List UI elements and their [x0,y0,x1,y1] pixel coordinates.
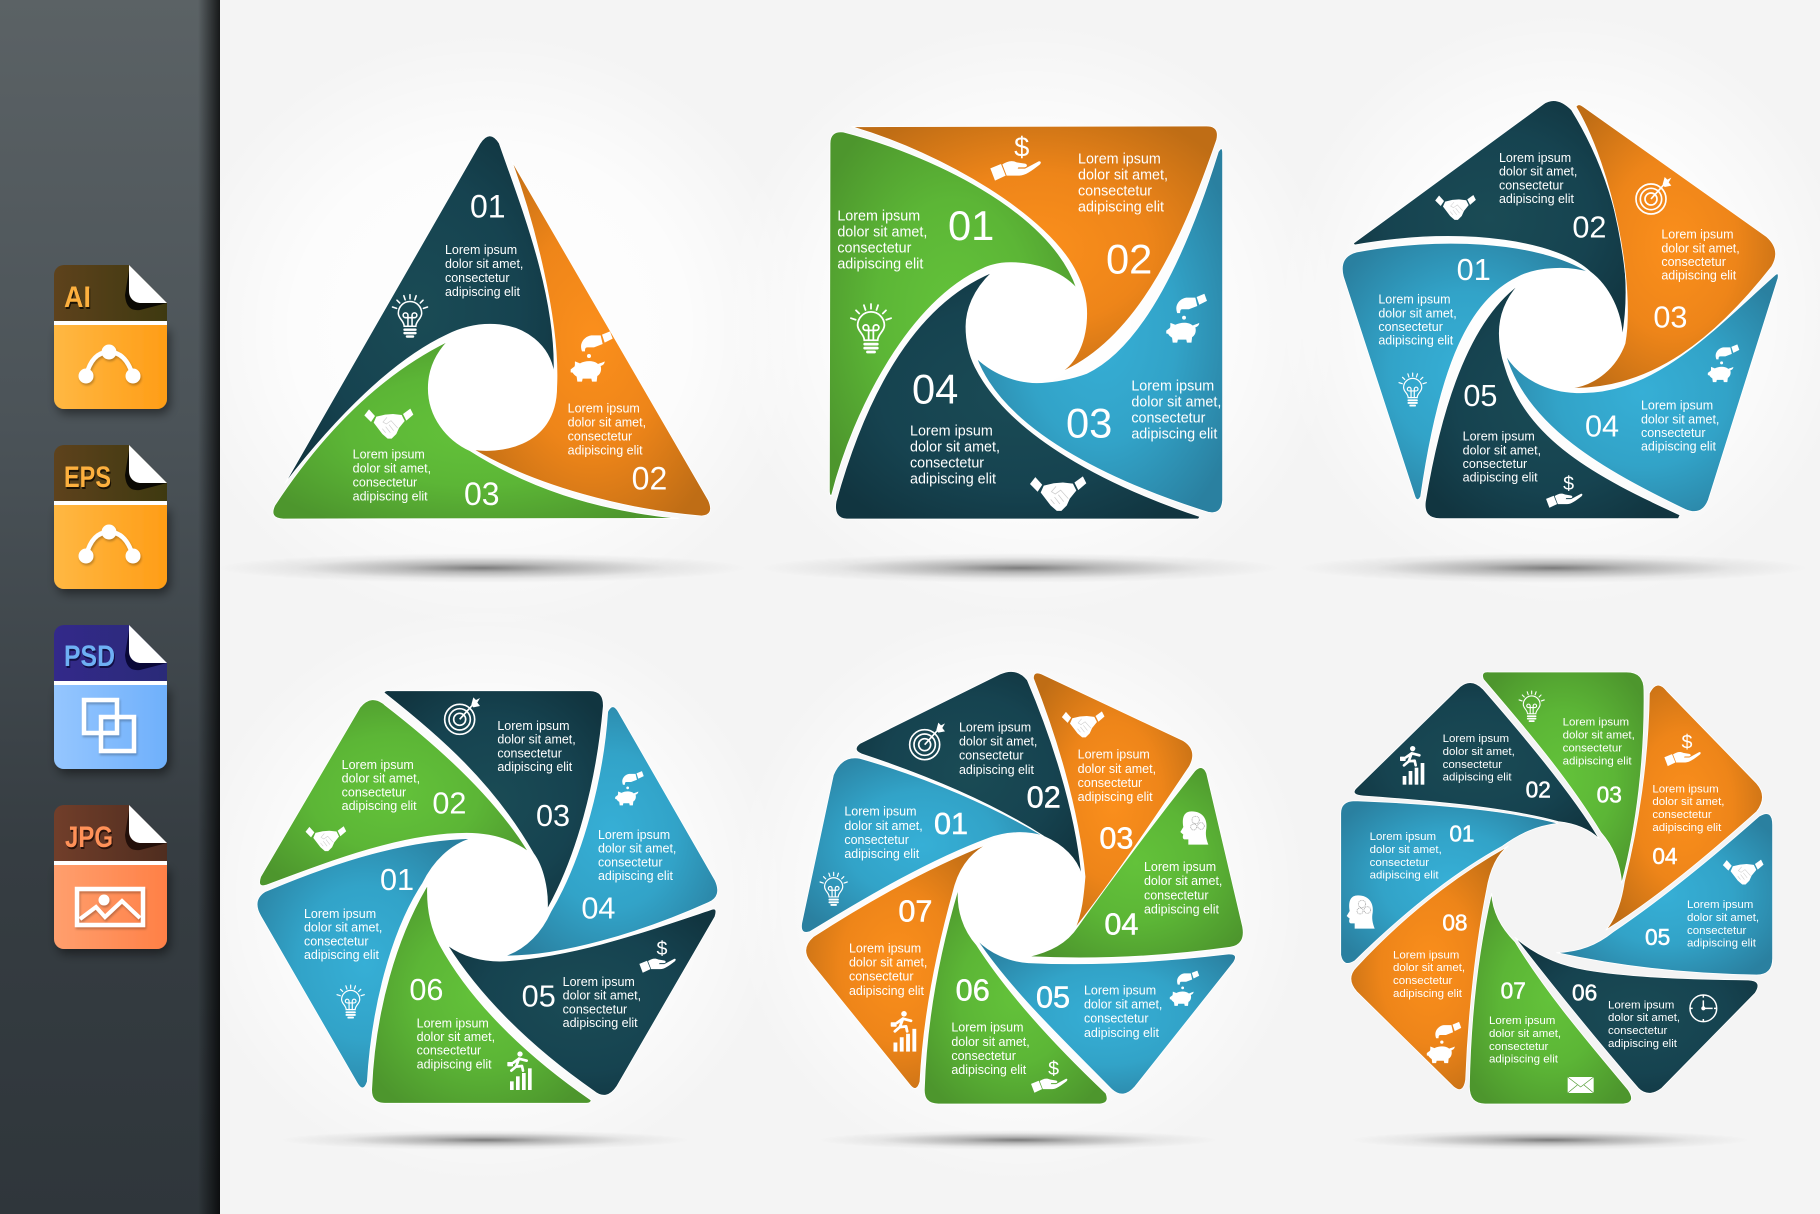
segment 01 [829,132,1077,495]
segment 07 [806,843,989,1088]
text 07: Lorem ipsum [849,941,921,955]
segment 01 [801,758,1043,932]
icon: piggy bank [571,331,613,382]
segment 03 [1033,673,1193,928]
panel: octagon diagram [1341,672,1773,1104]
number 01: 01 [470,189,506,225]
number 05: 05 [1036,981,1070,1015]
icon: bulb [1399,373,1426,406]
text 03: consectetur [353,475,417,489]
segment 05 [1425,285,1680,519]
segment 01 [285,136,554,483]
text 02: adipiscing elit [1499,192,1574,206]
text 08: dolor sit amet, [1393,962,1465,974]
text 05: dolor sit amet, [1084,997,1162,1011]
icon: envelope [1568,1077,1594,1093]
text 08: Lorem ipsum [1393,949,1459,961]
text 02: Lorem ipsum [959,720,1031,734]
text 03: consectetur [497,746,562,760]
text 07: dolor sit amet, [1489,1028,1561,1040]
icon: target [1636,177,1671,214]
text 06: adipiscing elit [417,1057,492,1071]
number 02: 02 [432,786,466,820]
text 03: consectetur [1078,776,1142,790]
number 03: 03 [1066,400,1112,447]
segment 04 [1506,274,1778,512]
text 02: consectetur [1443,759,1502,771]
text 05: consectetur [1084,1012,1149,1026]
number 04: 04 [912,365,958,412]
text 04: dolor sit amet, [1144,874,1222,888]
text 04: adipiscing elit [1652,822,1722,834]
text 02: adipiscing elit [568,444,643,458]
text 05: dolor sit amet, [563,989,641,1003]
number 05: 05 [522,980,556,1014]
icon: head with gears [1347,895,1375,929]
file icon: PSD: PSD [64,640,115,673]
text 02: Lorem ipsum [342,758,414,772]
text 05: Lorem ipsum [1463,430,1535,444]
text 07: adipiscing elit [1489,1054,1559,1066]
text 01: Lorem ipsum [1378,293,1451,307]
file icon: AI [54,265,167,409]
number 02: 02 [632,460,667,496]
number 02: 02 [1572,210,1606,244]
text 05: consectetur [1687,925,1747,937]
icon: piggy bank [1166,294,1207,343]
panel: square diagram [829,126,1223,519]
text 02: adipiscing elit [1443,772,1512,784]
icon: hand with dollar [1664,732,1701,766]
icon: piggy bank [1708,344,1739,382]
segment 04 [836,273,1200,519]
text 07: consectetur [849,970,914,984]
segment 01 [1341,801,1558,963]
number 06: 06 [1572,980,1597,1006]
file icon: EPS [54,445,167,589]
text 03: Lorem ipsum [1563,717,1629,729]
segment 02 [856,671,1082,875]
text 06: adipiscing elit [951,1063,1027,1077]
icon: bulb [392,295,428,337]
text 04: adipiscing elit [598,869,673,883]
text 01: adipiscing elit [844,847,920,861]
number 02: 02 [1027,781,1061,815]
text 02: dolor sit amet, [1078,167,1168,183]
text 03: consectetur [1131,411,1206,427]
number 08: 08 [1442,910,1468,936]
text 06: dolor sit amet, [417,1030,495,1044]
text 05: adipiscing elit [563,1016,638,1030]
icon: clock [1690,995,1717,1022]
text 01: Lorem ipsum [445,243,517,257]
text 02: Lorem ipsum [568,402,640,416]
text 01: consectetur [1378,320,1443,334]
text 01: consectetur [445,271,510,285]
text 06: Lorem ipsum [417,1016,489,1030]
number 03: 03 [1653,301,1687,335]
number 02: 02 [1106,235,1152,282]
segment 01 [1342,243,1589,500]
file icon: AI: AI [64,281,91,314]
text 02: Lorem ipsum [1499,151,1571,165]
segment 05 [447,909,716,1095]
segment 04 [505,707,718,956]
text 05: Lorem ipsum [563,975,635,989]
text 07: dolor sit amet, [849,955,927,969]
number 03: 03 [536,799,570,833]
text 06: dolor sit amet, [1608,1012,1680,1024]
text 03: adipiscing elit [1078,790,1153,804]
segment 07 [1469,893,1632,1104]
text 05: consectetur [1463,457,1527,471]
file icon: EPS: EPS [64,461,111,494]
text 04: Lorem ipsum [910,423,993,439]
text 05: adipiscing elit [1463,471,1538,485]
sidebar [0,0,220,1214]
number 01: 01 [1457,253,1491,287]
icon: handshake [1435,195,1476,220]
segment 08 [1351,846,1508,1090]
number 05: 05 [1645,924,1670,950]
segment 06 [924,888,1107,1104]
icon: hand with dollar [990,131,1041,181]
panel: heptagon diagram [801,671,1243,1104]
segment 04 [1606,685,1762,930]
glow: top row [170,10,1820,630]
icon: runner on bars [1400,746,1424,785]
ground shadows [217,553,1808,1150]
text 06: dolor sit amet, [951,1035,1030,1049]
text 04: consectetur [1641,426,1706,440]
text 01: adipiscing elit [837,256,923,272]
icon: bulb [851,304,891,352]
number 01: 01 [1449,820,1475,846]
segment 02 [852,126,1217,373]
text 05: adipiscing elit [1687,938,1757,950]
number 04: 04 [581,892,615,926]
icon: bulb [1519,691,1544,721]
text 02: consectetur [1078,183,1152,199]
number 07: 07 [1501,977,1526,1003]
number 06: 06 [956,974,990,1008]
text 04: Lorem ipsum [598,828,670,842]
number 03: 03 [1099,822,1133,856]
text 03: dolor sit amet, [1661,241,1740,255]
number 04: 04 [1652,843,1678,869]
segment 01 [257,838,472,1088]
text 03: Lorem ipsum [1131,379,1214,395]
text 03: Lorem ipsum [1661,228,1734,242]
text 08: consectetur [1393,975,1453,987]
number 01: 01 [934,807,968,841]
text 01: adipiscing elit [1370,870,1439,882]
panel: hexagon diagram [257,691,718,1103]
icon: handshake [306,826,346,851]
text 02: dolor sit amet, [1499,165,1577,179]
icon: piggy bank [1170,971,1199,1006]
number 07: 07 [898,895,932,929]
text 04: dolor sit amet, [1652,796,1724,808]
text 01: consectetur [837,240,912,256]
text 04: consectetur [910,455,984,471]
number 01: 01 [948,202,994,249]
text 01: dolor sit amet, [1378,306,1457,320]
text 04: dolor sit amet, [598,842,676,856]
text 04: Lorem ipsum [1652,783,1719,795]
segment 02 [1353,101,1626,337]
icon: piggy bank [615,771,644,805]
text 04: adipiscing elit [1641,440,1716,454]
segment 03 [1570,105,1776,388]
text 02: consectetur [568,430,632,444]
icon: handshake [364,409,413,439]
text 02: adipiscing elit [959,763,1034,777]
text 05: dolor sit amet, [1463,443,1541,457]
segment 05 [977,939,1235,1094]
segment 04 [1028,768,1243,958]
text 07: adipiscing elit [849,984,924,998]
text 01: dolor sit amet, [837,224,927,240]
text 01: Lorem ipsum [837,208,920,224]
number 01: 01 [380,863,414,897]
text 04: dolor sit amet, [910,439,1000,455]
icon: hand with dollar [1031,1058,1067,1093]
text 03: Lorem ipsum [1078,748,1150,762]
text 01: consectetur [304,934,369,948]
text 03: adipiscing elit [1131,427,1217,443]
text 03: adipiscing elit [497,760,573,774]
number 04: 04 [1104,907,1138,941]
text 02: consectetur [959,749,1024,763]
text 03: Lorem ipsum [353,447,425,461]
segment 02 [473,161,711,516]
text 01: consectetur [844,833,909,847]
file icon: JPG [54,805,167,949]
text 02: Lorem ipsum [1443,733,1509,745]
text 01: adipiscing elit [1378,334,1454,348]
text 01: dolor sit amet, [445,257,523,271]
text 04: adipiscing elit [910,471,996,487]
text 04: consectetur [1144,888,1209,902]
icon: handshake [1030,476,1086,511]
segment 06 [1515,937,1758,1093]
text 04: consectetur [598,855,663,869]
text 04: Lorem ipsum [1641,399,1713,413]
text 01: Lorem ipsum [304,907,376,921]
text 06: Lorem ipsum [1608,999,1674,1011]
segment 03 [977,149,1223,513]
text 05: adipiscing elit [1084,1026,1159,1040]
text 03: dolor sit amet, [353,461,431,475]
text 08: adipiscing elit [1393,988,1463,1000]
text 03: dolor sit amet, [1563,730,1635,742]
number 03: 03 [464,476,500,512]
glow: bottom row [185,605,1310,1185]
text 03: Lorem ipsum [497,719,570,733]
text 02: Lorem ipsum [1078,151,1161,167]
icon: runner on bars [891,1011,916,1052]
icon: hand with dollar [1546,473,1582,508]
segment 02 [260,700,528,886]
icon: target [910,723,945,760]
text 03: adipiscing elit [353,489,428,503]
text 05: consectetur [563,1002,627,1016]
icon: piggy bank [1427,1022,1461,1063]
number 02: 02 [1526,776,1551,802]
text 03: dolor sit amet, [1078,762,1156,776]
text 02: dolor sit amet, [1443,746,1515,758]
number 04: 04 [1585,410,1619,444]
text 05: Lorem ipsum [1084,983,1156,997]
icon: runner on bars [507,1051,532,1090]
text 07: Lorem ipsum [1489,1015,1555,1027]
text 03: adipiscing elit [1661,269,1737,283]
text 02: adipiscing elit [342,799,417,813]
text 06: adipiscing elit [1608,1038,1678,1050]
segment 05 [1557,814,1773,975]
text 01: adipiscing elit [445,285,520,299]
icon: handshake [1723,860,1764,885]
text 06: consectetur [417,1044,481,1058]
text 01: dolor sit amet, [1370,844,1442,856]
text 04: dolor sit amet, [1641,412,1719,426]
text 01: adipiscing elit [304,948,379,962]
panel: pentagon diagram [1342,101,1778,519]
file icon: JPG: JPG [65,821,113,854]
text 03: adipiscing elit [1563,755,1632,767]
number 05: 05 [1463,379,1497,413]
text 02: dolor sit amet, [342,772,420,786]
segment 03 [1482,672,1644,883]
text 03: dolor sit amet, [1131,395,1221,411]
text 01: consectetur [1370,857,1429,869]
icon: handshake [1062,711,1105,737]
icon: target [445,697,480,734]
text 04: Lorem ipsum [1144,860,1216,874]
text 01: Lorem ipsum [1370,831,1436,843]
text 06: Lorem ipsum [951,1021,1024,1035]
text 03: dolor sit amet, [497,733,576,747]
segment 03 [273,342,678,519]
text 02: consectetur [342,785,406,799]
segment 03 [384,691,603,909]
text 02: dolor sit amet, [568,416,646,430]
text 01: Lorem ipsum [844,805,917,819]
icon: bulb [820,872,847,905]
text 06: consectetur [1608,1025,1668,1037]
text 01: dolor sit amet, [304,921,382,935]
text 05: dolor sit amet, [1687,912,1759,924]
text 03: consectetur [1563,742,1622,754]
text 06: consectetur [951,1049,1016,1063]
number 06: 06 [409,973,443,1007]
text 02: dolor sit amet, [959,734,1037,748]
text 05: Lorem ipsum [1687,899,1753,911]
number 03: 03 [1597,781,1622,807]
file icon: PSD [54,625,167,769]
icon: bulb [337,985,364,1018]
panel: triangle diagram [273,136,711,519]
text 04: consectetur [1652,809,1712,821]
text 07: consectetur [1489,1041,1549,1053]
text 03: consectetur [1661,255,1726,269]
icon: head with gears [1180,811,1208,845]
text 01: dolor sit amet, [844,819,923,833]
segment 02 [1354,683,1599,839]
text 04: adipiscing elit [1144,902,1219,916]
text 02: adipiscing elit [1078,199,1164,215]
text 02: consectetur [1499,178,1564,192]
icon: hand with dollar [639,938,676,973]
segment 06 [372,885,591,1103]
